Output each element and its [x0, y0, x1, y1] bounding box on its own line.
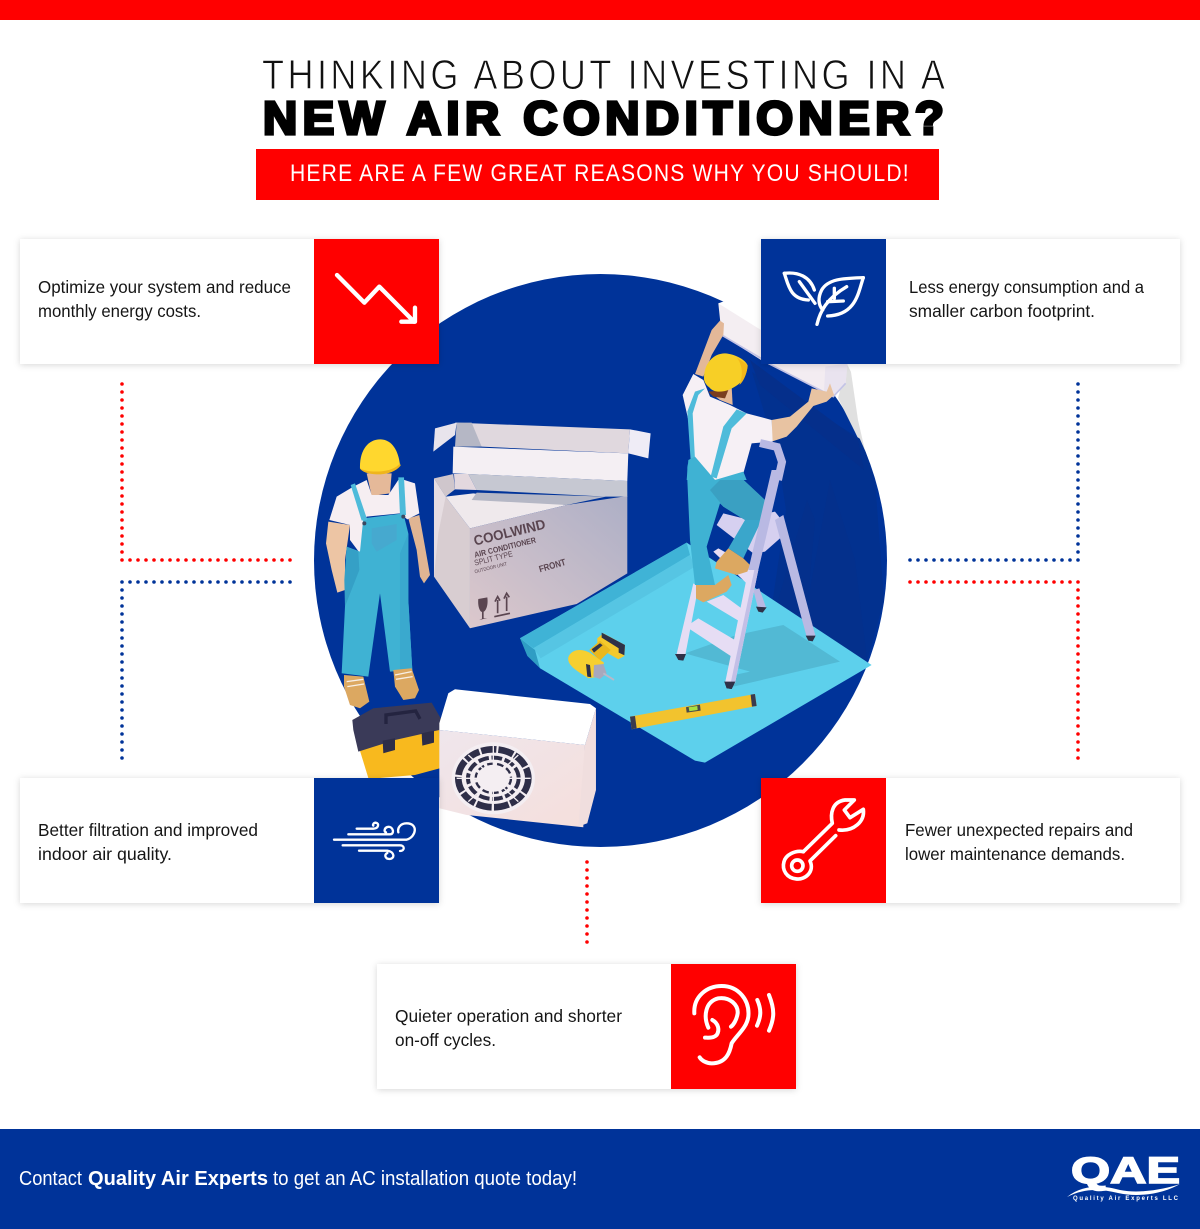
ladder shadow on sheet — [685, 625, 840, 687]
toolbox — [352, 703, 442, 778]
title: NEW AIR CONDITIONER? — [263, 93, 944, 144]
title — [262, 53, 945, 144]
text: carbon footprint: Less energy consumption and a — [909, 277, 1144, 297]
text: repairs: Fewer unexpected repairs and — [905, 820, 1133, 840]
red dotted connector: top left — [122, 384, 290, 560]
text: energy costs: Optimize your system and reduce — [38, 277, 291, 297]
icon: leaves — [784, 273, 863, 324]
logo: QAE: Quality Air Experts LLC — [1073, 1196, 1179, 1202]
top red bar — [0, 0, 1200, 20]
wall shadow — [750, 360, 884, 668]
panel: quieter operation — [377, 964, 796, 1089]
logo: QAE: QAE — [1071, 1150, 1180, 1191]
footer call to action: Contact — [19, 1168, 82, 1190]
icon: wrench — [783, 800, 863, 879]
icon: wind — [334, 823, 415, 859]
cardboard box: COOLWIND — [472, 516, 547, 549]
drop sheet — [520, 543, 872, 763]
text: carbon footprint — [909, 277, 1144, 321]
cardboard box: SPLIT TYPE — [473, 549, 514, 568]
text: repairs — [905, 820, 1133, 864]
ladder front rail — [724, 470, 782, 689]
panel: better air quality — [20, 778, 439, 903]
text: energy costs — [38, 277, 291, 321]
icon: downward trend arrow — [337, 275, 415, 322]
cardboard box: AIR CONDITIONER — [473, 535, 537, 560]
indoor AC unit — [718, 302, 848, 397]
cardboard box: OUTDOOR UNIT — [474, 561, 508, 575]
panel: reduced energy costs — [20, 239, 439, 364]
red dotted connector: bottom centre — [585, 862, 589, 944]
footer — [0, 1129, 1200, 1229]
worker on ladder — [683, 321, 834, 602]
text: air quality — [38, 820, 258, 864]
panel: smaller carbon footprint — [761, 239, 1180, 364]
cardboard box: FRONT — [538, 557, 567, 574]
icon: ear — [694, 986, 773, 1063]
text: quieter operation — [395, 1006, 622, 1050]
panel: fewer repairs — [761, 778, 1180, 903]
cardboard box — [433, 423, 651, 628]
logo: QAE — [1067, 1150, 1180, 1202]
subtitle banner: HERE ARE A FEW GREAT REASONS WHY YOU SHOULD! — [290, 160, 909, 186]
text: energy costs: monthly energy costs. — [38, 301, 201, 321]
worker standing with toolbox — [326, 439, 430, 708]
text: air quality: indoor air quality. — [38, 844, 172, 864]
title: THINKING ABOUT INVESTING IN A — [262, 53, 945, 99]
subtitle banner — [256, 149, 939, 200]
text: repairs: lower maintenance demands. — [905, 844, 1125, 864]
footer call to action: to get an AC installation quote today! — [273, 1168, 577, 1190]
text: quieter operation: Quieter operation and shorter — [395, 1006, 622, 1026]
outdoor AC unit — [439, 689, 596, 827]
footer call to action — [19, 1168, 577, 1190]
wall corner shading — [838, 364, 866, 455]
text: quieter operation: on-off cycles. — [395, 1030, 496, 1050]
red dotted connector: lower right — [910, 582, 1078, 758]
blue dotted connector: top right — [910, 384, 1078, 560]
illustration: installers and AC units — [326, 302, 884, 827]
footer call to action: Quality Air Experts — [88, 1168, 268, 1190]
blue dotted connector: lower left — [122, 582, 290, 758]
blue central circle — [314, 274, 887, 847]
text: carbon footprint: smaller carbon footprint. — [909, 301, 1095, 321]
text: air quality: Better filtration and improved — [38, 820, 258, 840]
ladder back parts — [675, 512, 816, 689]
drill and spirit level — [568, 633, 757, 729]
